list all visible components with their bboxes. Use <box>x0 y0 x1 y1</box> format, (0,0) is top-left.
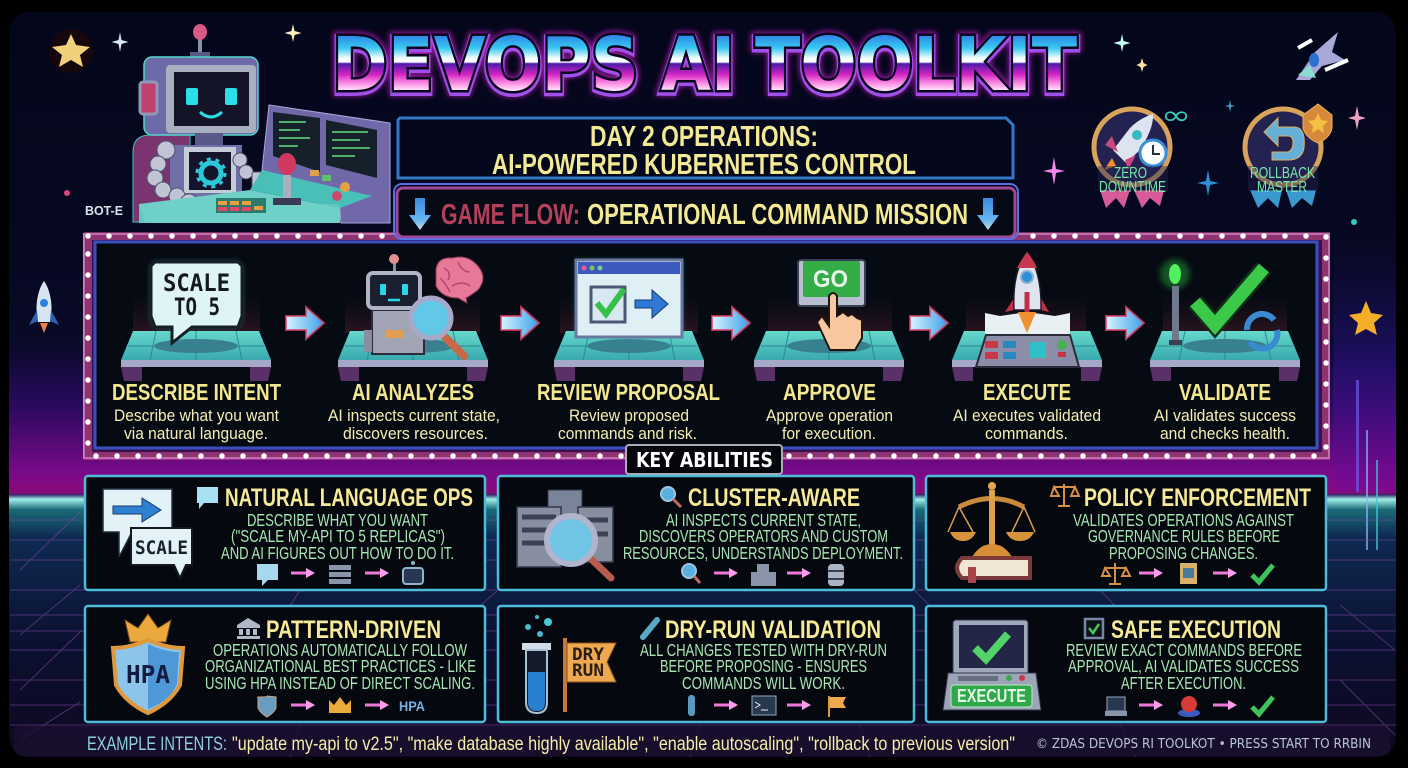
footer: credit: © ZDAS DEVOPS RI TOOLKOT • PRESS START TO RRBIN <box>1036 737 1371 752</box>
title: AI <box>661 22 735 108</box>
stars <box>64 24 1383 335</box>
icon: small rocket left <box>29 281 59 333</box>
step 4: approve: for execution. <box>782 424 876 443</box>
step 3: review proposal <box>537 260 720 443</box>
subtitle panel: DAY 2 OPERATIONS: <box>590 121 818 153</box>
icon: execute terminal: EXECUTE <box>957 686 1026 706</box>
title: AI <box>661 24 735 110</box>
icon: dry run flag: RUN <box>572 661 604 681</box>
step 5: execute: EXECUTE <box>983 379 1071 405</box>
step 6: validate: and checks health. <box>1160 424 1290 443</box>
icon: speech bubbles: SCALE <box>135 537 188 559</box>
card: policy enforcement: PROPOSING CHANGES. <box>1109 543 1258 563</box>
icon: HPA shield: HPA <box>126 660 170 689</box>
icon: test tube <box>522 615 552 713</box>
arrow <box>712 307 750 339</box>
title: AI <box>661 22 735 108</box>
card: cluster-aware: AI INSPECTS CURRENT STATE, <box>666 510 861 530</box>
step 3: review proposal: Review proposed <box>569 406 689 425</box>
card: cluster-aware: RESOURCES, UNDERSTANDS DEPLOYMENT. <box>623 543 903 563</box>
card: cluster-aware <box>498 476 914 590</box>
card: natural language ops: DESCRIBE WHAT YOU WANT <box>247 510 428 530</box>
control console <box>139 105 390 223</box>
step 4: approve: APPROVE <box>783 379 876 405</box>
icon: servers and magnifier <box>517 490 613 578</box>
card: pattern-driven: USING HPA INSTEAD OF DIRECT SCALING. <box>205 673 475 693</box>
robot body <box>147 133 278 212</box>
mini flow <box>258 696 425 717</box>
title: TOOLKIT <box>755 22 1077 108</box>
title: DEVOPS <box>332 24 639 110</box>
icon: gold star top left <box>49 29 93 73</box>
mini flow <box>688 695 846 717</box>
step 1: describe intent: SCALE <box>163 269 230 297</box>
card: natural language ops: NATURAL LANGUAGE OPS <box>225 484 473 512</box>
icon: bank <box>237 618 260 639</box>
panel: workflow steps <box>95 242 1317 448</box>
icon: rollback master badge: MASTER <box>1257 179 1307 196</box>
card: cluster-aware: DISCOVERS OPERATORS AND CUSTOM <box>639 526 888 546</box>
title: DEVOPS <box>332 22 639 108</box>
step 5: execute: commands. <box>985 424 1068 443</box>
subtitle panel <box>398 118 1013 181</box>
marquee frame: game flow <box>84 234 1329 458</box>
icon: scales and book <box>948 482 1035 583</box>
icon: dry run flag <box>563 638 616 712</box>
card: cluster-aware: CLUSTER-AWARE <box>688 484 860 512</box>
step 5: execute <box>952 252 1102 443</box>
subtitle panel: AI-POWERED KUBERNETES CONTROL <box>492 149 916 181</box>
title: AI <box>661 23 735 109</box>
icon: check box small <box>1085 619 1103 638</box>
card: pattern-driven <box>85 606 485 722</box>
arrow <box>286 307 324 339</box>
card: safe execution <box>926 606 1326 722</box>
step 1: describe intent: DESCRIBE INTENT <box>112 379 281 405</box>
step 3: review proposal: REVIEW PROPOSAL <box>537 379 720 405</box>
card: pattern-driven: PATTERN-DRIVEN <box>266 616 441 644</box>
icon: magnifier small <box>661 487 681 507</box>
icon: antenna <box>190 24 210 60</box>
step 4: approve <box>754 260 904 443</box>
title: TOOLKIT <box>755 24 1077 110</box>
step 3: review proposal: commands and risk. <box>558 424 697 443</box>
BOT-E label: BOT-E <box>85 203 123 218</box>
step 2: AI analyzes <box>328 254 500 443</box>
footer: example intents: EXAMPLE INTENTS: <box>87 734 227 755</box>
card: policy enforcement: VALIDATES OPERATIONS AGAINST <box>1073 510 1294 530</box>
card: policy enforcement: POLICY ENFORCEMENT <box>1084 484 1311 512</box>
icon: zero downtime badge <box>1094 101 1191 208</box>
mini flow <box>1105 696 1273 717</box>
card: dry-run validation: DRY-RUN VALIDATION <box>665 616 881 644</box>
icon: dry run flag: DRY <box>572 645 605 665</box>
icon: tube small <box>643 620 657 637</box>
step 4: approve: GO <box>813 266 848 293</box>
icon: zero downtime badge: ∞ <box>1161 101 1191 131</box>
card: safe execution: SAFE EXECUTION <box>1111 616 1281 644</box>
step 2: AI analyzes: AI inspects current state, <box>328 406 500 425</box>
icon: rollback master badge <box>1245 104 1332 208</box>
step 1: describe intent: via natural language. <box>124 424 268 443</box>
card: policy enforcement: GOVERNANCE RULES BEFORE <box>1088 526 1280 546</box>
card: dry-run validation: ALL CHANGES TESTED WITH DRY-RUN <box>640 640 887 660</box>
icon: execute terminal <box>943 620 1041 710</box>
arrow <box>1106 307 1144 339</box>
title: TOOLKIT <box>755 22 1077 108</box>
step 6: validate: VALIDATE <box>1179 379 1271 405</box>
card: pattern-driven: ORGANIZATIONAL BEST PRACTICES - LIKE <box>205 656 476 676</box>
icon: zero downtime badge: DOWNTIME <box>1099 179 1166 196</box>
card: natural language ops: AND AI FIGURES OUT HOW TO DO IT. <box>221 543 454 563</box>
title: DEVOPS <box>332 23 639 109</box>
footer: example intents: "update my-api to v2.5", "make database highly available", "enable autoscaling", "rollback to previous version" <box>232 734 1015 755</box>
key abilities heading: KEY ABILITIES <box>636 448 773 472</box>
step 4: approve: Approve operation <box>766 406 893 425</box>
icon: spaceship top right <box>1296 32 1348 80</box>
title: DEVOPS <box>332 22 639 108</box>
robot operator BOT-E at console <box>133 24 390 223</box>
arrow <box>501 307 539 339</box>
step 2: AI analyzes: discovers resources. <box>343 424 488 443</box>
step 6: validate <box>1150 259 1300 443</box>
icon: speech small <box>197 487 218 509</box>
step 1: describe intent: TO 5 <box>174 293 220 321</box>
robot head <box>140 57 258 135</box>
title <box>332 22 1077 110</box>
card: natural language ops: ("SCALE MY-API TO 5 REPLICAS") <box>231 526 445 546</box>
badge: game flow heading: OPERATIONAL COMMAND MISSION <box>587 199 968 231</box>
icon: zero downtime badge: ZERO <box>1114 165 1147 182</box>
mini flow: HPA <box>399 698 425 714</box>
step 6: validate: AI validates success <box>1154 406 1296 425</box>
card: pattern-driven: OPERATIONS AUTOMATICALLY FOLLOW <box>213 640 467 660</box>
icon: HPA shield <box>113 614 183 713</box>
chair <box>133 135 190 222</box>
step 5: execute: AI executes validated <box>953 406 1101 425</box>
icon: scales small <box>1051 484 1079 506</box>
card: natural language ops <box>85 476 485 590</box>
mini flow <box>257 561 423 586</box>
arrow <box>910 307 948 339</box>
step 2: AI analyzes: AI ANALYZES <box>352 379 474 405</box>
badge: game flow heading: GAME FLOW: <box>441 199 580 231</box>
badge: game flow heading <box>394 184 1018 239</box>
card: safe execution: APPROVAL, AI VALIDATES SUCCESS <box>1068 656 1299 676</box>
mini flow <box>682 564 844 586</box>
card: policy enforcement <box>926 476 1326 590</box>
mini flow <box>1102 563 1273 584</box>
card: dry-run validation: BEFORE PROPOSING - ENSURES <box>660 656 867 676</box>
title: TOOLKIT <box>755 23 1077 109</box>
step 1: describe intent <box>112 262 281 443</box>
step 1: describe intent: Describe what you want <box>114 406 279 425</box>
card: safe execution: REVIEW EXACT COMMANDS BEFORE <box>1066 640 1302 660</box>
icon: speech bubbles <box>103 489 192 578</box>
card: dry-run validation: COMMANDS WILL WORK. <box>682 673 845 693</box>
icon: joystick <box>273 153 301 205</box>
card: safe execution: AFTER EXECUTION. <box>1121 673 1246 693</box>
icon: rollback master badge: ROLLBACK <box>1250 165 1315 182</box>
card: dry-run validation <box>498 606 914 722</box>
